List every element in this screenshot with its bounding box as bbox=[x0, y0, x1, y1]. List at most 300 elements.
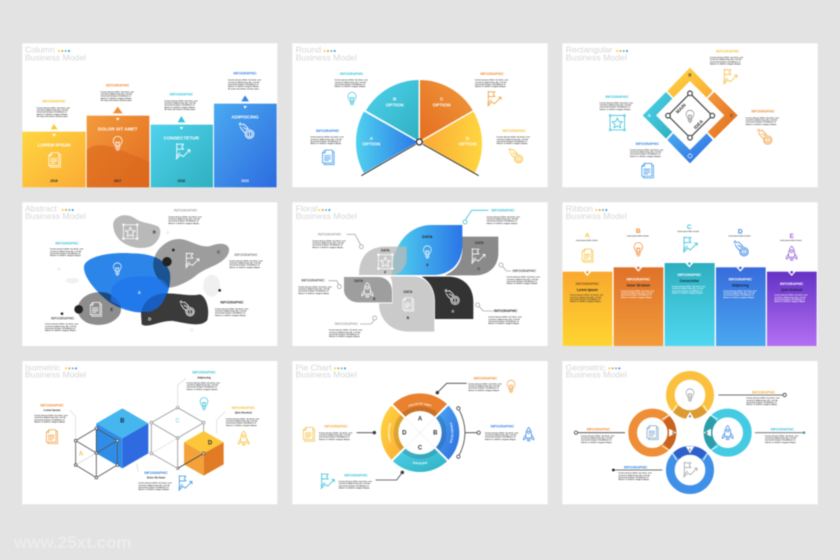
title bbox=[25, 45, 86, 63]
callout D: Quis Nostrud bbox=[235, 411, 252, 415]
callout C: sectetur adipiscing elit, sed do bbox=[746, 118, 778, 121]
callout A bbox=[600, 95, 634, 131]
callout B: Lorem ipsum dolor sit amet, con bbox=[138, 482, 172, 485]
callout 2018: eiusmod tempor incididunt ut bbox=[164, 104, 195, 107]
ring letters: A bbox=[418, 417, 423, 423]
ribbon A bbox=[563, 233, 612, 346]
callout C: labore et dolore magna aliqua. bbox=[746, 123, 777, 126]
panel background bbox=[22, 43, 277, 187]
callout D bbox=[215, 300, 249, 317]
callout C bbox=[321, 474, 373, 489]
callout A: INFOGRAPHIC bbox=[55, 241, 79, 245]
callout C: INFOGRAPHIC bbox=[624, 465, 648, 469]
data labels bbox=[354, 234, 484, 294]
callout C: INFOGRAPHIC bbox=[751, 110, 775, 114]
callout B bbox=[485, 425, 534, 441]
callout B: eiusmod tempor incididunt ut bbox=[335, 83, 365, 86]
callout E: sectetur adipiscing elit, sed do bbox=[298, 287, 331, 290]
callout 2019: Lorem ipsum dolor sit amet, con bbox=[228, 79, 262, 82]
callout C bbox=[187, 371, 221, 410]
callout A: sectetur adipiscing elit, sed do bbox=[310, 138, 343, 141]
callout D: eiusmod tempor incididunt ut bbox=[215, 312, 246, 315]
ribbon A: Lorem Ipsum bbox=[577, 288, 598, 292]
callout 2016: sectetur adipiscing elit, sed do bbox=[37, 108, 69, 111]
callout 2018: INFOGRAPHIC bbox=[170, 93, 194, 97]
wire cube A bbox=[74, 427, 119, 479]
column: 2019 bbox=[214, 95, 277, 187]
ring A bbox=[670, 375, 710, 419]
callout C: Lorem ipsum dolor sit amet, con bbox=[746, 116, 780, 119]
lower edge lines and hub bbox=[361, 139, 479, 176]
callout E: INFOGRAPHIC bbox=[301, 279, 325, 283]
wire cube C bbox=[150, 406, 205, 470]
column: 2019: 2019 bbox=[241, 179, 249, 183]
diamond segment D bbox=[667, 133, 713, 163]
ribbon E: Lorem ipsum dolor sit amet, con bbox=[774, 294, 808, 297]
column: 2016: 2016 bbox=[50, 179, 58, 183]
petal letters: F bbox=[384, 270, 386, 274]
ribbon B: B bbox=[636, 228, 641, 235]
callout C: INFOGRAPHIC bbox=[234, 253, 258, 257]
ribbon B: eiusmod tempor incididunt ut bbox=[621, 294, 652, 297]
callout B: eiusmod tempor incididunt ut bbox=[485, 436, 516, 439]
callout A bbox=[50, 241, 84, 257]
connector lines bbox=[328, 210, 511, 324]
diamond segment A bbox=[643, 92, 672, 139]
callout B: INFOGRAPHIC bbox=[174, 209, 198, 213]
blob letters: E bbox=[110, 307, 113, 312]
callout A bbox=[310, 129, 344, 165]
callout D: eiusmod tempor incididunt ut bbox=[319, 436, 350, 439]
callout 2019: labore et dolore magna aliqua. bbox=[228, 85, 260, 88]
main idea frame bbox=[666, 91, 715, 140]
ribbon A: sectetur adipiscing elit, sed do bbox=[570, 296, 602, 299]
callout A: sectetur adipiscing elit, sed do bbox=[600, 103, 632, 106]
ribbon C: sectetur adipiscing elit, sed do bbox=[672, 287, 704, 290]
ribbon C bbox=[665, 224, 715, 346]
callout C: INFOGRAPHIC bbox=[344, 474, 368, 478]
ring segment C bbox=[392, 448, 448, 472]
title bbox=[296, 204, 357, 221]
blob B bbox=[113, 215, 160, 248]
wedge labels: B bbox=[393, 97, 397, 102]
callout B: INFOGRAPHIC bbox=[335, 322, 359, 326]
callout A: INFOGRAPHIC bbox=[40, 404, 64, 408]
callout 2016: Ut enim ad minim veniam quis bbox=[37, 115, 69, 118]
callout B: labore et dolore magna aliqua. bbox=[765, 441, 797, 444]
callout F: eiusmod tempor incididunt ut bbox=[312, 244, 343, 247]
callout 2016: labore et dolore magna aliqua. bbox=[37, 113, 68, 116]
callout B: eiusmod tempor incididunt ut bbox=[710, 60, 741, 63]
diamond segment B bbox=[667, 68, 713, 98]
title: Isometric bbox=[25, 362, 61, 372]
segment letters: B bbox=[688, 72, 692, 77]
cube B bbox=[96, 408, 148, 468]
callout A: labore et dolore magna aliqua. bbox=[487, 222, 518, 225]
callout D: INFOGRAPHIC bbox=[587, 428, 611, 432]
wedge labels bbox=[362, 97, 477, 147]
column: 2017: DOLOR SIT AMET bbox=[98, 127, 138, 132]
callout D: eiusmod tempor incididunt ut bbox=[581, 439, 612, 442]
callout C: eiusmod tempor incididunt ut bbox=[229, 264, 260, 267]
ribbon E: labore et dolore magna aliqua. bbox=[774, 300, 806, 303]
wedge labels: C bbox=[440, 97, 444, 102]
callout A: Lorem ipsum dolor sit amet, con bbox=[468, 382, 502, 385]
callout A: Lorem ipsum dolor sit amet, con bbox=[746, 397, 780, 400]
callout 2019: INFOGRAPHIC bbox=[233, 72, 257, 76]
column: 2017: 2017 bbox=[114, 179, 122, 183]
callout E: eiusmod tempor incididunt ut bbox=[298, 290, 329, 293]
ring segment D bbox=[381, 405, 405, 460]
callout C: Lorem ipsum dolor sit amet, con bbox=[475, 79, 509, 82]
callout B: labore et dolore magna aliqua. bbox=[335, 85, 366, 88]
panel: ribbon business model bbox=[562, 202, 818, 346]
callout C: Lorem ipsum dolor sit amet, con bbox=[618, 472, 652, 475]
callout F: INFOGRAPHIC bbox=[318, 233, 342, 237]
wedge labels: OPTION bbox=[362, 142, 381, 147]
callout D: eiusmod tempor incididunt ut bbox=[630, 153, 661, 156]
column: 2017 bbox=[87, 107, 149, 187]
callout E bbox=[45, 316, 79, 332]
leader lines bbox=[70, 378, 225, 472]
title: Ribbon bbox=[566, 204, 593, 214]
callout A: sectetur adipiscing elit, sed do bbox=[34, 416, 67, 419]
callout D: INFOGRAPHIC bbox=[636, 142, 660, 146]
callout C: INFOGRAPHIC bbox=[513, 269, 537, 273]
title bbox=[566, 362, 627, 380]
callout 2019: Ut enim ad minim veniam quis bbox=[228, 87, 260, 90]
callout B: Lorem ipsum dolor sit amet, con bbox=[329, 329, 363, 332]
callout C: Adipiscing bbox=[197, 375, 211, 379]
ribbon E: E bbox=[789, 233, 794, 240]
callout C: INFOGRAPHIC bbox=[480, 72, 504, 76]
callout B: sectetur adipiscing elit, sed do bbox=[765, 436, 797, 439]
callout C: sectetur adipiscing elit, sed do bbox=[618, 474, 651, 477]
callout C: sectetur adipiscing elit, sed do bbox=[229, 261, 262, 264]
panel background bbox=[22, 202, 277, 346]
data labels: DATA bbox=[422, 234, 433, 239]
title bbox=[25, 362, 86, 380]
ribbon A: Lorem ipsum dolor sit amet, con bbox=[570, 294, 604, 297]
blob letters: C bbox=[217, 249, 220, 254]
callout D: Lorem ipsum dolor sit amet, con bbox=[319, 431, 353, 434]
ring D: D bbox=[672, 431, 675, 435]
callout A: sectetur adipiscing elit, sed do bbox=[487, 217, 519, 220]
callout B: INFOGRAPHIC bbox=[716, 50, 740, 54]
ribbon A: labore et dolore magna aliqua. bbox=[570, 300, 602, 303]
callout D: sectetur adipiscing elit, sed do bbox=[319, 433, 351, 436]
watermark: www.25xt.com bbox=[13, 533, 131, 552]
callout B: INFOGRAPHIC bbox=[771, 428, 795, 432]
title: Abstract bbox=[25, 204, 57, 214]
wedge labels: OPTION bbox=[433, 102, 451, 107]
callout B: labore et dolore magna aliqua. bbox=[138, 488, 170, 491]
callout D: labore et dolore magna aliqua. bbox=[319, 438, 351, 441]
cube letters: A bbox=[79, 452, 84, 458]
callout A: Lorem ipsum dolor sit amet, con bbox=[310, 136, 344, 139]
title: Floral bbox=[296, 204, 317, 214]
callout 2017: sectetur adipiscing elit, sed do bbox=[101, 92, 133, 95]
callout B: labore et dolore magna aliqua. bbox=[485, 438, 517, 441]
callout D: labore et dolore magna aliqua. bbox=[488, 322, 520, 325]
title: Business Model bbox=[566, 211, 627, 221]
column: 2018: CONSECTETUR bbox=[164, 136, 200, 141]
callout D: Lorem ipsum dolor sit amet, con bbox=[488, 316, 522, 319]
ring labels: LOREM IPSUM bbox=[387, 422, 392, 443]
title bbox=[566, 204, 627, 221]
ribbon C: Lorem ipsum dolor sit amet, con bbox=[672, 285, 706, 288]
ribbon B: Dolor Sit Amet bbox=[627, 283, 651, 287]
petal letters: A bbox=[426, 263, 429, 267]
cube letters: D bbox=[208, 440, 213, 446]
callout E: eiusmod tempor incididunt ut bbox=[45, 327, 76, 330]
ribbon C: eiusmod tempor incididunt ut bbox=[672, 289, 703, 292]
blob letters: A bbox=[138, 290, 142, 295]
title: Business Model bbox=[566, 370, 627, 380]
callout A: labore et dolore magna aliqua. bbox=[468, 389, 500, 392]
fan chart bbox=[355, 79, 483, 174]
petal icons bbox=[362, 246, 485, 311]
callout D: labore et dolore magna aliqua. bbox=[581, 441, 613, 444]
callout C: Lorem ipsum dolor sit amet, con bbox=[187, 381, 221, 384]
callout C: eiusmod tempor incididunt ut bbox=[339, 484, 369, 487]
callout C: labore et dolore magna aliqua. bbox=[618, 478, 650, 481]
wedge D bbox=[419, 111, 483, 174]
callout D bbox=[303, 425, 353, 441]
callout C: labore et dolore magna aliqua. bbox=[507, 282, 538, 285]
cube letters: C bbox=[176, 419, 181, 425]
data labels: DATA bbox=[381, 248, 390, 252]
callout A: Lorem ipsum dolor sit amet, con bbox=[50, 248, 84, 251]
callout 2018: sectetur adipiscing elit, sed do bbox=[164, 101, 197, 104]
callout A: INFOGRAPHIC bbox=[474, 376, 498, 380]
callout 2018: Ut enim ad minim veniam quis bbox=[164, 108, 196, 111]
callout A bbox=[746, 390, 780, 406]
panel background bbox=[22, 361, 277, 504]
callout B: sectetur adipiscing elit, sed do bbox=[168, 217, 201, 220]
title: Business Model bbox=[25, 53, 86, 63]
blob C bbox=[153, 239, 229, 288]
ring labels: ADIPISCING bbox=[412, 461, 428, 466]
callout A: eiusmod tempor incididunt ut bbox=[50, 252, 81, 255]
callout C bbox=[746, 110, 780, 144]
petal letters: D bbox=[452, 309, 455, 313]
callout B: labore et dolore magna aliqua. bbox=[710, 62, 742, 65]
connector left bbox=[357, 431, 376, 434]
callout A: sectetur adipiscing elit, sed do bbox=[50, 250, 82, 253]
callout D bbox=[226, 406, 260, 446]
callout C bbox=[507, 269, 541, 285]
callout C: sectetur adipiscing elit, sed do bbox=[475, 81, 507, 84]
callout 2018 bbox=[164, 93, 198, 111]
callout A: labore et dolore magna aliqua. bbox=[34, 420, 66, 423]
callout B: eiusmod tempor incididunt ut bbox=[765, 439, 796, 442]
callout B: eiusmod tempor incididunt ut bbox=[329, 333, 360, 336]
callout A: INFOGRAPHIC bbox=[605, 95, 629, 99]
blob D bbox=[141, 293, 208, 326]
title: Column bbox=[25, 45, 55, 55]
ring letters: D bbox=[402, 431, 407, 437]
callout 2016 bbox=[37, 100, 71, 118]
callout 2016: eiusmod tempor incididunt ut bbox=[37, 111, 67, 114]
blob letters: D bbox=[148, 317, 151, 322]
ribbon E: INFOGRAPHIC bbox=[780, 282, 804, 286]
callout A: sectetur adipiscing elit, sed do bbox=[468, 384, 501, 387]
title bbox=[25, 204, 86, 221]
callout C: labore et dolore magna aliqua. bbox=[187, 388, 218, 391]
column: 2019: ADIPISCING bbox=[231, 115, 259, 120]
callout E: labore et dolore magna aliqua. bbox=[45, 329, 77, 332]
ribbon B: sectetur adipiscing elit, sed do bbox=[621, 291, 653, 294]
title: Business Model bbox=[296, 53, 357, 63]
connector right bbox=[457, 407, 480, 458]
ribbon B bbox=[614, 228, 663, 346]
panel: isometric business model bbox=[22, 361, 277, 504]
ribbon D: D bbox=[738, 228, 743, 235]
ring C bbox=[670, 446, 710, 490]
ribbon A: eiusmod tempor incididunt ut bbox=[570, 298, 601, 301]
ring D bbox=[633, 413, 676, 452]
ring shading and separators bbox=[391, 404, 449, 461]
callout 2017: Ut enim ad minim veniam quis bbox=[101, 99, 132, 102]
main idea frame: IDEA bbox=[693, 118, 705, 130]
callout C bbox=[229, 253, 263, 269]
petal left light bbox=[359, 247, 407, 275]
ribbon D: Adipiscing bbox=[732, 283, 749, 287]
callout D: INFOGRAPHIC bbox=[324, 425, 348, 429]
petal letters: C bbox=[477, 267, 480, 271]
wedge C bbox=[419, 79, 474, 142]
callout D: labore et dolore magna aliqua. bbox=[630, 155, 662, 158]
title bbox=[296, 45, 357, 63]
callout F: sectetur adipiscing elit, sed do bbox=[312, 241, 345, 244]
ring letters: B bbox=[433, 431, 438, 437]
main idea frame: MAIN bbox=[675, 102, 687, 115]
callout F: labore et dolore magna aliqua. bbox=[312, 246, 344, 249]
callout B: sectetur adipiscing elit, sed do bbox=[485, 433, 517, 436]
callout B: Lorem ipsum dolor sit amet, con bbox=[168, 215, 202, 218]
callout C: labore et dolore magna aliqua. bbox=[339, 486, 370, 489]
callout C: eiusmod tempor incididunt ut bbox=[475, 83, 506, 86]
ribbon B: labore et dolore magna aliqua. bbox=[621, 296, 653, 299]
ribbon A: Lorem ipsum dolor sit amet bbox=[576, 239, 598, 242]
ribbon E: eiusmod tempor incididunt ut bbox=[774, 298, 805, 301]
callout C bbox=[475, 72, 509, 106]
callout A: eiusmod tempor incididunt ut bbox=[600, 106, 630, 109]
callout B: eiusmod tempor incididunt ut bbox=[138, 486, 169, 489]
petal letters: E bbox=[373, 297, 376, 301]
petal mid gray bbox=[344, 277, 392, 303]
callout B: Lorem ipsum dolor sit amet, con bbox=[485, 431, 519, 434]
data labels: DATA bbox=[404, 290, 413, 294]
callout 2016: Lorem ipsum dolor sit amet, con bbox=[37, 106, 71, 109]
callout D: Lorem ipsum dolor sit amet, con bbox=[630, 148, 664, 151]
callout 2016: INFOGRAPHIC bbox=[42, 100, 66, 104]
callout D: labore et dolore magna aliqua. bbox=[215, 314, 247, 317]
callout D: Lorem ipsum dolor sit amet, con bbox=[215, 307, 249, 310]
ribbon D: sectetur adipiscing elit, sed do bbox=[723, 291, 756, 294]
ribbon E: sectetur adipiscing elit, sed do bbox=[774, 296, 807, 299]
ring B: B bbox=[705, 431, 708, 435]
callout B: sectetur adipiscing elit, sed do bbox=[710, 58, 742, 61]
wedge B bbox=[365, 79, 419, 142]
callout B: Dolor Sit Amet bbox=[147, 476, 165, 480]
callout B: Lorem ipsum dolor sit amet, con bbox=[765, 434, 799, 437]
ring B bbox=[704, 413, 747, 452]
ring segment B bbox=[435, 405, 459, 460]
callout C bbox=[618, 465, 652, 481]
callout A: INFOGRAPHIC bbox=[316, 129, 340, 133]
callout 2018: labore et dolore magna aliqua. bbox=[164, 106, 196, 109]
title bbox=[296, 362, 357, 380]
callout D: labore et dolore magna aliqua. bbox=[497, 142, 528, 145]
ribbon C: INFOGRAPHIC bbox=[678, 273, 702, 277]
title: Rectangular bbox=[566, 45, 612, 55]
callout E bbox=[298, 279, 332, 295]
title: Business Model bbox=[296, 370, 357, 380]
callout C: Lorem ipsum dolor sit amet, con bbox=[507, 276, 541, 279]
callout 2017: eiusmod tempor incididunt ut bbox=[101, 95, 131, 98]
callout A: INFOGRAPHIC bbox=[752, 390, 776, 394]
callout B: sectetur adipiscing elit, sed do bbox=[138, 484, 171, 487]
ribbon B: INFOGRAPHIC bbox=[627, 278, 651, 282]
panel background bbox=[292, 43, 548, 187]
wedge labels: OPTION bbox=[459, 142, 477, 147]
callout F: Lorem ipsum dolor sit amet, con bbox=[312, 239, 346, 242]
title bbox=[566, 45, 628, 63]
callout A: labore et dolore magna aliqua. bbox=[746, 403, 778, 406]
callout 2017 bbox=[101, 84, 135, 102]
callout D: Lorem ipsum dolor sit amet, con bbox=[497, 136, 531, 139]
callout A: Lorem ipsum dolor sit amet, con bbox=[600, 101, 634, 104]
callout C: sectetur adipiscing elit, sed do bbox=[187, 383, 219, 386]
ribbon E: Quis Nostrud bbox=[781, 288, 802, 292]
callout D: eiusmod tempor incididunt ut bbox=[497, 140, 527, 143]
column: 2018 bbox=[151, 116, 213, 187]
callout 2017: INFOGRAPHIC bbox=[106, 84, 130, 88]
ribbon D: labore et dolore magna aliqua. bbox=[723, 296, 755, 299]
data labels: DATA bbox=[475, 241, 484, 245]
callout E: sectetur adipiscing elit, sed do bbox=[45, 325, 77, 328]
callout B bbox=[765, 428, 799, 444]
column: 2016 bbox=[22, 124, 86, 187]
ring labels: DOLOR SIT AMET bbox=[408, 402, 432, 408]
callout B bbox=[168, 209, 202, 225]
callout B: INFOGRAPHIC bbox=[340, 72, 364, 76]
callout A: Lorem ipsum dolor sit amet, con bbox=[487, 215, 521, 218]
callout D: INFOGRAPHIC bbox=[494, 309, 518, 313]
ribbon C: labore et dolore magna aliqua. bbox=[672, 291, 704, 294]
callout D bbox=[497, 129, 531, 163]
ribbon D: Lorem ipsum dolor sit amet bbox=[729, 235, 751, 238]
column: 2018: 2018 bbox=[178, 179, 185, 183]
panel background bbox=[292, 361, 548, 504]
callout D: sectetur adipiscing elit, sed do bbox=[488, 318, 521, 321]
connector top bbox=[436, 383, 467, 394]
callout B: Lorem ipsum dolor sit amet, con bbox=[710, 56, 744, 59]
ribbon B: Lorem ipsum dolor sit amet bbox=[627, 235, 649, 238]
panel: geometric business model bbox=[562, 361, 818, 504]
callout 2017: Lorem ipsum dolor sit amet, con bbox=[101, 90, 135, 93]
diamond segment C bbox=[708, 92, 738, 139]
callout D: INFOGRAPHIC bbox=[502, 129, 526, 133]
petal blue bbox=[392, 225, 462, 275]
callout B: Lorem ipsum dolor sit amet, con bbox=[335, 79, 369, 82]
callout C: labore et dolore magna aliqua. bbox=[475, 85, 507, 88]
wedge labels: A bbox=[370, 136, 374, 141]
ribbon D: Lorem ipsum dolor sit amet, con bbox=[723, 289, 757, 292]
callout C: sectetur adipiscing elit, sed do bbox=[339, 482, 371, 485]
